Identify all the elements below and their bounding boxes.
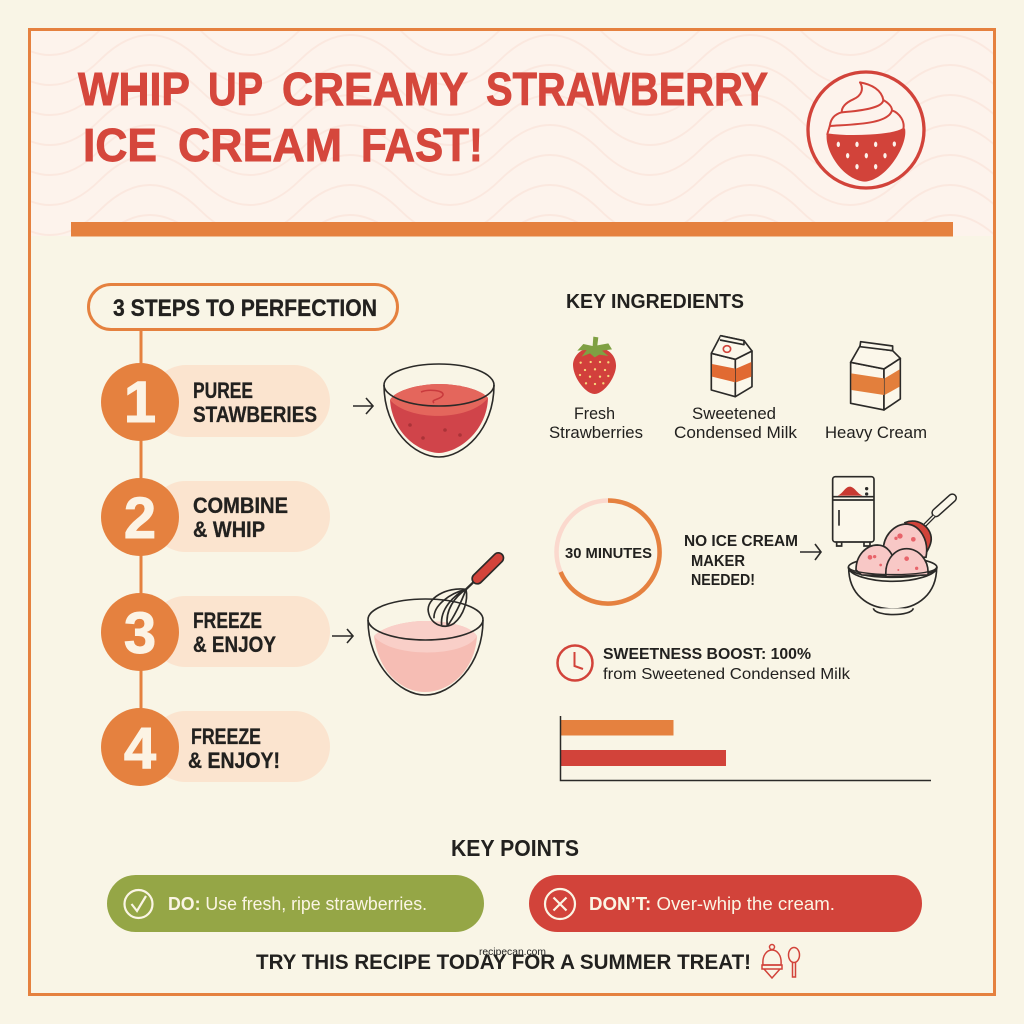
icon: clock xyxy=(558,646,592,680)
icon: freezer xyxy=(833,477,874,546)
step 4: 4 xyxy=(124,716,156,781)
icon: strawberry ice cream badge xyxy=(808,72,924,188)
icon: ice cream and spoon xyxy=(762,944,800,978)
title: WHIP xyxy=(78,63,190,115)
don't pill: DON’T: Over-whip the cream. xyxy=(589,894,835,914)
panel: key ingredients xyxy=(549,291,927,442)
ingredient: heavy cream xyxy=(825,342,927,442)
title: STRAWBERRY xyxy=(486,63,768,115)
step 4 xyxy=(101,708,330,786)
header bar xyxy=(71,222,953,236)
progress ring: 30 minutes xyxy=(556,500,660,604)
panel: key points xyxy=(107,835,922,978)
step 1: 1 xyxy=(124,370,156,435)
step 4: & ENJOY! xyxy=(188,748,280,773)
title xyxy=(78,63,768,171)
ingredient: fresh strawberries: Strawberries xyxy=(549,424,643,442)
do pill: DO: Use fresh, ripe strawberries. xyxy=(168,894,427,914)
panel: time xyxy=(556,477,952,615)
timeline line xyxy=(140,330,142,750)
ingredient: fresh strawberries xyxy=(549,337,643,442)
don't pill xyxy=(529,875,922,932)
do pill xyxy=(107,875,484,932)
title: UP xyxy=(208,63,263,115)
icon: bowl of strawberry puree xyxy=(384,364,494,457)
watermark: recipecan.com xyxy=(479,947,546,958)
ingredients heading: KEY INGREDIENTS xyxy=(566,291,744,313)
sweetness text xyxy=(603,646,851,683)
no ice cream maker text: NO ICE CREAM xyxy=(684,533,798,550)
step 1: PUREE xyxy=(193,378,253,403)
ingredient: sweetened condensed milk: Sweetened xyxy=(692,405,776,423)
bar chart xyxy=(560,716,931,780)
step 1 xyxy=(101,363,330,441)
step 3: 3 xyxy=(124,601,156,666)
step 3 xyxy=(101,593,330,671)
sweetness text: SWEETNESS BOOST: 100% xyxy=(603,646,811,663)
step 3: FREEZE xyxy=(193,608,262,633)
header xyxy=(71,63,953,236)
sweetness text: from Sweetened Condensed Milk xyxy=(603,666,851,683)
arrow: to ice cream xyxy=(800,544,821,560)
no ice cream maker text: MAKER xyxy=(691,553,745,570)
step 2: 2 xyxy=(124,486,156,551)
step 3: & ENJOY xyxy=(193,632,276,657)
step 2 xyxy=(101,478,330,556)
step 2: & WHIP xyxy=(193,517,265,542)
ingredient: sweetened condensed milk: Condensed Milk xyxy=(674,424,798,442)
progress ring: 30 minutes: 30 MINUTES xyxy=(565,545,652,562)
step 1: STAWBERIES xyxy=(193,402,317,427)
icon: bowl with whisk xyxy=(368,558,498,695)
ingredient: heavy cream: Heavy Cream xyxy=(825,424,927,442)
panel: sweetness boost xyxy=(558,646,931,780)
panel: steps xyxy=(88,284,498,786)
no ice cream maker text: NEEDED! xyxy=(691,572,755,589)
arrow: step 3 to bowl xyxy=(332,629,353,643)
icon: ice cream scoops in bowl xyxy=(848,498,952,615)
steps heading xyxy=(88,284,398,330)
no ice cream maker text xyxy=(684,533,798,589)
title: ICE xyxy=(83,119,157,171)
arrow: step 1 to bowl xyxy=(353,398,373,414)
steps heading: 3 STEPS TO PERFECTION xyxy=(113,295,377,322)
title: FAST! xyxy=(361,119,483,171)
title: CREAM xyxy=(178,119,342,171)
ingredient: sweetened condensed milk xyxy=(674,336,798,442)
ingredient: fresh strawberries: Fresh xyxy=(574,405,615,423)
key points heading: KEY POINTS xyxy=(451,835,579,861)
step 4: FREEZE xyxy=(191,724,261,749)
step 2: COMBINE xyxy=(193,493,288,518)
title: CREAMY xyxy=(282,63,468,115)
call to action: TRY THIS RECIPE TODAY FOR A SUMMER TREAT! xyxy=(256,951,751,974)
